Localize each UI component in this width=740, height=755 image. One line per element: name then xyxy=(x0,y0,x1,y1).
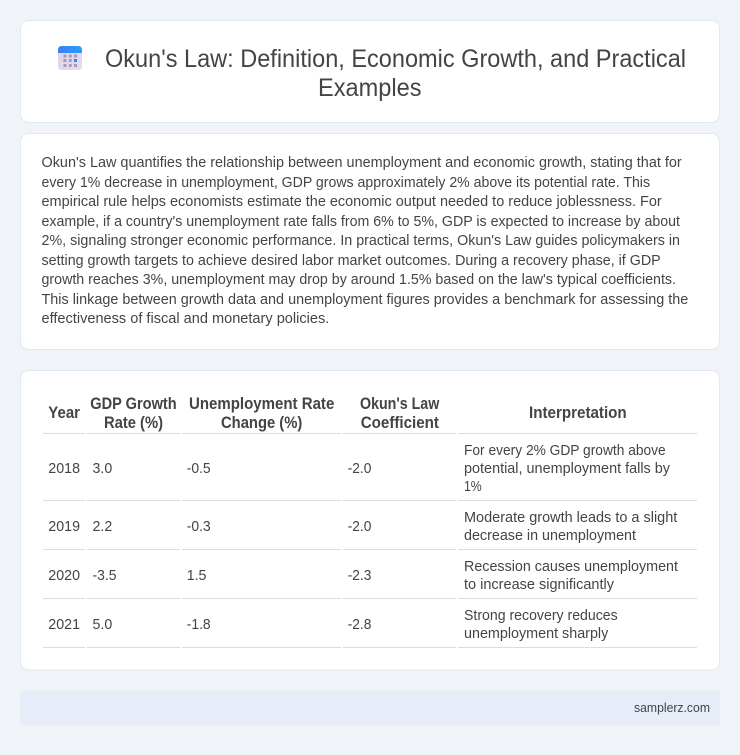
panel: data table xyxy=(20,370,720,670)
title xyxy=(105,45,686,102)
table header: Coefficient xyxy=(361,414,439,432)
table row: 2020: 2020 xyxy=(48,567,80,584)
table header: Okun's Law xyxy=(360,395,439,413)
table row: 2018 xyxy=(48,442,670,495)
table row: 2021: 5.0 xyxy=(92,616,112,633)
table row: 2019: decrease in unemployment xyxy=(464,527,637,544)
text block: description paragraph xyxy=(42,154,688,327)
table row: 2019: 2019 xyxy=(48,518,80,535)
table row: 2020: Recession causes unemployment xyxy=(464,558,679,575)
table row: 2018: -0.5 xyxy=(187,460,211,477)
text block: description paragraph: effectiveness of fiscal and monetary policies. xyxy=(42,310,329,327)
title: Okun's Law: Definition, Economic Growth, and Practical xyxy=(105,45,686,73)
table row: 2021: unemployment sharply xyxy=(464,625,609,642)
text block: description paragraph: Okun's Law quantifies the relationship between unemployment and economic growth, stating that for xyxy=(42,154,682,171)
table row: 2018: 1% xyxy=(464,478,482,495)
table row: 2020 xyxy=(48,558,679,593)
table row: 2018: -2.0 xyxy=(348,460,371,477)
table row: 2020: to increase significantly xyxy=(464,576,614,593)
text block: description paragraph: This linkage between growth data and unemployment figures provides a benchmark for assessing the xyxy=(42,291,688,308)
text block: description paragraph: every 1% decrease in unemployment, GDP grows approximately 2% above its potential rate. This xyxy=(42,174,650,191)
panel: title card xyxy=(20,20,720,122)
table header: Interpretation xyxy=(529,404,627,422)
table row: 2021 xyxy=(48,607,618,642)
text block: description paragraph: growth reaches 3%, unemployment may drop by around 1.5% based on the law's typical coefficients. xyxy=(42,271,676,288)
table row: 2020: 1.5 xyxy=(187,567,206,584)
text block: description paragraph: setting growth targets to achieve desired labor market outcomes. During a recovery phase, if GDP xyxy=(42,252,661,269)
table row: 2021: Strong recovery reduces xyxy=(464,607,618,624)
footer bar xyxy=(20,691,720,725)
table header: Rate (%) xyxy=(104,414,163,432)
table row: 2020: -2.3 xyxy=(348,567,371,584)
panel: description xyxy=(20,134,720,350)
text block: description paragraph: example, if a country's unemployment rate falls from 6% to 5%, GDP is expected to increase by about xyxy=(42,213,681,230)
table row: 2019: Moderate growth leads to a slight xyxy=(464,509,678,526)
table row: 2018: 2018 xyxy=(48,460,80,477)
table row: 2018: For every 2% GDP growth above xyxy=(464,442,666,459)
table header: Unemployment Rate xyxy=(189,395,334,413)
table header: Year xyxy=(48,404,81,422)
icon: calendar xyxy=(58,46,82,70)
table header xyxy=(48,395,627,432)
title: Examples xyxy=(318,74,422,102)
table row: 2021: -1.8 xyxy=(187,616,211,633)
text block: description paragraph: 2%, signaling stronger economic performance. In practical terms, Okun's Law guides policymakers in xyxy=(42,232,680,249)
table row: 2018: potential, unemployment falls by xyxy=(464,460,670,477)
table row: 2019: -0.3 xyxy=(187,518,211,535)
table header: Change (%) xyxy=(221,414,302,432)
table row: 2018: 3.0 xyxy=(92,460,112,477)
table row: 2020: -3.5 xyxy=(92,567,116,584)
table header: GDP Growth xyxy=(90,395,177,413)
footer text: samplerz.com xyxy=(634,700,710,715)
table row: 2019 xyxy=(48,509,678,544)
text block: description paragraph: empirical rule helps economists estimate the economic output needed to reduce joblessness. For xyxy=(42,193,662,210)
table row: 2019: -2.0 xyxy=(348,518,371,535)
table row: 2019: 2.2 xyxy=(92,518,112,535)
table row: 2021: 2021 xyxy=(48,616,80,633)
table row: 2021: -2.8 xyxy=(348,616,371,633)
